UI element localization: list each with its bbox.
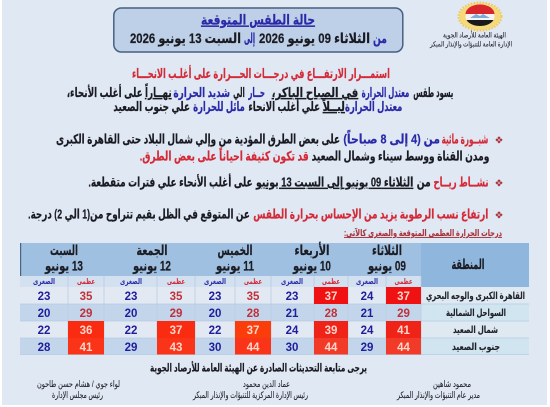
table header band: الخميس: [218, 242, 252, 258]
region names: شمال الصعيد: [453, 325, 498, 336]
general summary paragraph: الي: [233, 85, 245, 100]
table header band: 12 يونيو: [132, 258, 171, 274]
min/max sub-header: [33, 277, 412, 286]
bullet: humidity: عن المتوقع في الظل بقيم تتراوح من(1 الي 2) درجة.: [28, 207, 250, 222]
maximum temperatures: 44: [247, 342, 260, 354]
logo: meteorological authority: الإدارة العامة للتنبؤات والإنذار المبكر: [429, 40, 512, 48]
minimum temperatures: 20: [125, 308, 137, 320]
general summary paragraph: معتدل الحرارة: [345, 99, 402, 114]
min/max sub-header: الصغرى: [120, 277, 142, 286]
general summary paragraph: [67, 83, 453, 114]
minimum temperatures: 24: [361, 325, 374, 337]
general summary paragraph: معتدل الحرارة: [362, 85, 409, 100]
signature: central department head: رئيس الإدارة المركزية للتنبؤات والإنذار المبكر: [192, 390, 308, 401]
logo: meteorological authority: الهيئة العامة للأرصاد الجوية: [443, 30, 506, 40]
general summary paragraph: علي أغلب الانحاء: [248, 98, 320, 114]
general summary paragraph: شديد الحرارة: [173, 85, 230, 100]
bullet: wind activity: [88, 174, 504, 190]
title box: [114, 8, 403, 52]
min/max sub-header: الصغرى: [356, 277, 378, 286]
min/max sub-header: عظمى: [322, 277, 340, 286]
maximum temperatures: 35: [80, 291, 93, 303]
min/max sub-header: عظمى: [394, 277, 412, 286]
maximum temperatures: 29: [80, 308, 92, 320]
table header band: الجمعة: [136, 242, 168, 258]
table header band: 09 يونيو: [367, 258, 406, 274]
maximum temperatures: 28: [247, 308, 260, 320]
highlighted hot cells: [68, 287, 421, 354]
minimum temperatures: 22: [38, 325, 50, 337]
maximum temperatures: 28: [325, 308, 338, 320]
date range: [130, 30, 387, 47]
maximum temperatures: 29: [397, 308, 410, 320]
bullet: humidity: ❖: [495, 211, 504, 222]
minimum temperatures: [38, 291, 374, 354]
minimum temperatures: 24: [361, 291, 374, 303]
maximum temperatures: [80, 291, 410, 354]
general summary paragraph: نهــاراً: [145, 83, 172, 100]
min/max sub-header: عظمى: [167, 277, 185, 286]
signature: general manager: مدير عام التنبؤات والإنذار المبكر: [396, 390, 480, 401]
minimum temperatures: 20: [38, 308, 50, 320]
minimum temperatures: 21: [286, 308, 299, 320]
date range: السبت 13 يونيو 2026: [130, 30, 241, 47]
minimum temperatures: 23: [209, 291, 221, 303]
min/max sub-header: عظمى: [77, 277, 95, 286]
signature: central department head: [192, 379, 308, 401]
maximum temperatures: 39: [325, 325, 337, 337]
general summary paragraph: يسود طقس: [413, 85, 453, 100]
min/max sub-header: الصغرى: [204, 277, 226, 286]
bullet: morning fog: على بعض الطرق المؤدية من وإلي شمال البلاد حتى القاهرة الكبرى: [56, 132, 340, 146]
table header band: 11 يونيو: [215, 258, 254, 274]
maximum temperatures: 35: [247, 291, 260, 303]
maximum temperatures: 29: [170, 308, 182, 320]
table header band: 10 يونيو: [292, 258, 331, 274]
region names: جنوب الصعيد: [452, 342, 500, 353]
maximum temperatures: 43: [170, 342, 182, 354]
region names: السواحل الشمالية: [446, 308, 506, 319]
maximum temperatures: 44: [325, 342, 338, 354]
bullet: morning fog: من (4 إلى 8 صباحاً): [343, 130, 440, 146]
bullet: wind activity: ❖: [495, 179, 504, 190]
maximum temperatures: 41: [397, 325, 410, 337]
maximum temperatures: 37: [170, 325, 182, 337]
maximum temperatures: 37: [247, 325, 259, 337]
table header band: 13 يونيو: [44, 258, 83, 274]
table header band: المنطقة: [452, 256, 484, 272]
signature: central department head: عماد الدين محمود: [243, 379, 290, 389]
table header band: الأربعاء: [294, 242, 330, 258]
row backgrounds: [20, 276, 529, 354]
signature: chairman: رئيس مجلس الإدارة: [52, 390, 103, 401]
minimum temperatures: 30: [209, 342, 221, 354]
minimum temperatures: 20: [209, 308, 221, 320]
minimum temperatures: 23: [286, 291, 298, 303]
maximum temperatures: 35: [170, 291, 183, 303]
bullet: wind activity: من: [417, 175, 431, 190]
minimum temperatures: 23: [38, 291, 50, 303]
minimum temperatures: 29: [361, 342, 373, 354]
general summary paragraph: في الصباح الباكر،: [272, 85, 358, 100]
signature: chairman: [37, 379, 120, 401]
bullet: morning fog: ❖: [495, 136, 504, 146]
temperature table: [20, 242, 529, 354]
signature: chairman: لواء جوي / هشام حسن طاحون: [37, 379, 120, 389]
bullet: morning fog: قد تكون كثيفة احياناً على بعض الطرق.: [140, 147, 309, 164]
minimum temperatures: 22: [125, 325, 137, 337]
min/max sub-header: الصغرى: [281, 277, 303, 286]
table header band: [20, 242, 529, 287]
bullet: wind activity: نشــاط ريــاح: [434, 175, 488, 190]
minimum temperatures: 28: [38, 342, 51, 354]
general summary paragraph: علي جنوب الصعيد: [113, 99, 190, 114]
heading: rising temperatures: استمـــرار الارتفـــاع في درجـــات الحـــرارة على أغلـب الانحـــاء: [132, 65, 390, 81]
region names: [426, 291, 525, 353]
minimum temperatures: 29: [125, 342, 137, 354]
min/max sub-header: عظمى: [244, 277, 262, 286]
min/max sub-header: الصغرى: [33, 277, 55, 286]
general summary paragraph: ليــلاً: [322, 98, 345, 114]
bullet: morning fog: [56, 130, 504, 164]
minimum temperatures: 24: [286, 325, 299, 337]
date range: الثلاثاء 09 يونيو 2026: [259, 30, 370, 47]
minimum temperatures: 23: [125, 291, 137, 303]
bullet: wind activity: الثلاثاء 09 يونيو إلى السبت 13 يونيو: [255, 175, 413, 190]
table header band: الثلاثاء: [372, 242, 402, 258]
maximum temperatures: 36: [80, 325, 92, 337]
maximum temperatures: 37: [397, 291, 410, 303]
minimum temperatures: 21: [361, 308, 374, 320]
bullet: wind activity: على أغلب الأنحاء علي فترات متقطعة.: [88, 174, 253, 190]
signature: general manager: محمود شاهين: [433, 379, 471, 389]
bullet: humidity: [28, 207, 504, 222]
title: حالة الطقس المتوقعة: [201, 12, 315, 28]
logo: meteorological authority: [429, 2, 512, 48]
bullet: morning fog: شبــورة مائية: [442, 132, 488, 146]
maximum temperatures: 44: [397, 342, 410, 354]
date range: إلى: [244, 30, 255, 47]
table header band: السبت: [50, 242, 78, 258]
general summary paragraph: حــار: [248, 85, 265, 100]
general summary paragraph: مائل للحرارة: [193, 99, 245, 114]
date range: من: [373, 30, 387, 47]
maximum temperatures: 41: [80, 342, 93, 354]
follow-up note: يرجى متابعة التحديثات الصادرة عن الهيئة العامة للأرصاد الجوية: [150, 360, 367, 374]
minimum temperatures: 22: [209, 325, 221, 337]
signature: general manager: [396, 379, 480, 401]
minimum temperatures: 30: [286, 342, 298, 354]
general summary paragraph: على أغلب الأنحاء،: [67, 84, 143, 100]
maximum temperatures: 37: [325, 291, 337, 303]
